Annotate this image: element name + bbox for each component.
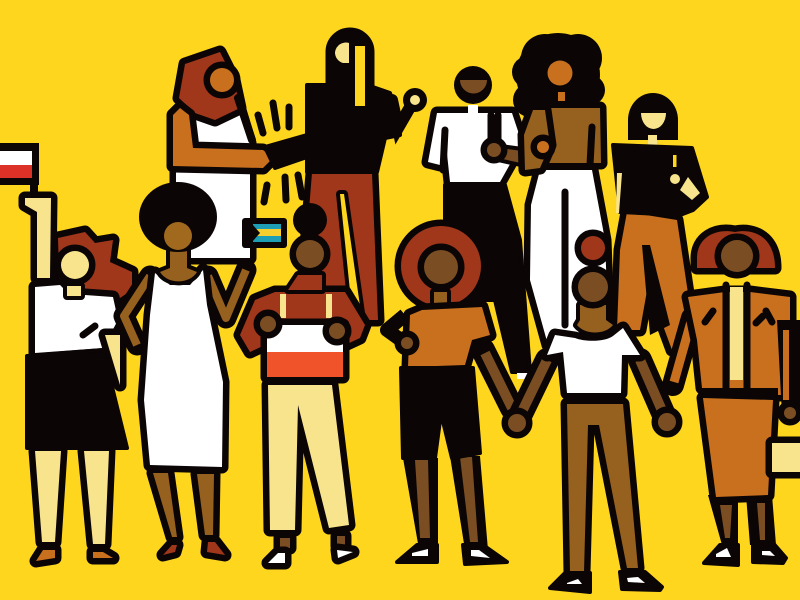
- forearm: [680, 177, 700, 200]
- red trousers: [300, 173, 378, 320]
- neck: [577, 305, 613, 332]
- brick red shirt and arms: [240, 292, 365, 352]
- neck: [648, 135, 657, 151]
- bent arm: [173, 108, 273, 168]
- face: [164, 222, 192, 250]
- trousers: [567, 404, 638, 572]
- handbag: [772, 443, 800, 472]
- neck: [160, 250, 197, 281]
- head: [578, 272, 608, 302]
- long hair: [327, 29, 373, 110]
- black top: [613, 145, 707, 215]
- jacket: [688, 292, 790, 395]
- black jacket: [265, 85, 400, 172]
- neck: [468, 105, 478, 115]
- hands: [508, 414, 526, 432]
- pocket arm line: [443, 130, 445, 170]
- raised fist: [403, 88, 427, 112]
- flag: white and red: [0, 143, 39, 196]
- orange shirt: [408, 307, 490, 367]
- hand: [784, 407, 796, 419]
- hijab edge: [238, 98, 252, 140]
- handshake motion lines: [258, 103, 302, 202]
- sign: white and red stripes: [267, 325, 343, 377]
- hair: [401, 226, 481, 306]
- person: woman with flag raised: [0, 143, 132, 561]
- foot: [517, 373, 528, 379]
- head: [296, 240, 324, 268]
- cream trousers: [268, 385, 349, 530]
- arm lines: [491, 115, 498, 140]
- trouser centre line: [562, 192, 568, 325]
- right arm: [777, 320, 800, 415]
- person: man in white shirt: [428, 66, 530, 379]
- arm: [524, 110, 550, 170]
- black skirt: [27, 350, 127, 448]
- head: [61, 251, 89, 279]
- face: [210, 68, 234, 92]
- person: woman with large afro: [512, 33, 608, 345]
- lowered forearm: [105, 335, 120, 385]
- hand: [537, 141, 549, 153]
- person: woman in orange suit: [673, 231, 800, 565]
- left arm: [517, 360, 547, 422]
- hair: [628, 93, 678, 140]
- legs: [403, 458, 438, 555]
- blouse: [730, 287, 743, 380]
- curly red hair: [58, 232, 132, 300]
- black shorts: [401, 368, 480, 458]
- raised arm: [25, 198, 51, 278]
- head: [424, 250, 458, 284]
- lapels and centre lines: [705, 285, 772, 392]
- black trousers: [445, 185, 530, 372]
- shoes: [550, 573, 590, 592]
- face: [460, 80, 487, 94]
- neck: [434, 292, 447, 308]
- shoes: [268, 553, 285, 563]
- hand: [670, 174, 680, 184]
- hijab: [179, 52, 240, 120]
- legs: [35, 451, 61, 542]
- person: woman with black bob: [613, 93, 707, 350]
- head: [454, 66, 492, 104]
- shirt: [428, 113, 520, 182]
- face: [335, 43, 349, 63]
- legs: [153, 473, 177, 537]
- raised arm: [392, 100, 413, 128]
- waist fold: [590, 127, 592, 165]
- afro: [139, 182, 217, 252]
- bun: [581, 236, 605, 260]
- hip arm: [124, 276, 150, 345]
- right arm: [483, 350, 512, 408]
- shoes: [704, 545, 738, 565]
- ankles: [280, 536, 345, 548]
- left arm: [673, 318, 692, 385]
- brown top: [545, 108, 601, 163]
- hand: [401, 337, 413, 349]
- right arm: [640, 360, 667, 422]
- neck area: [288, 275, 322, 290]
- person: woman with bun and sign: [240, 203, 365, 563]
- skirt: [703, 398, 773, 497]
- hand: [487, 143, 501, 157]
- white shirt: [35, 285, 118, 353]
- legs: [708, 495, 738, 545]
- white dress: [176, 110, 250, 258]
- neck: [558, 92, 565, 101]
- afro hair: [512, 33, 605, 117]
- shirt fold: [83, 326, 95, 335]
- face: [548, 60, 572, 86]
- bun: [293, 203, 327, 237]
- white trousers: [530, 170, 608, 345]
- shoes: [397, 545, 437, 562]
- trouser wedge: [642, 245, 670, 335]
- shirt: [547, 328, 640, 393]
- Bahamas flag: [242, 218, 287, 248]
- straps: [280, 294, 286, 318]
- white dress: [144, 270, 223, 467]
- forearm: [498, 148, 530, 165]
- orange trousers: [617, 212, 695, 350]
- neck: [67, 286, 81, 296]
- person: woman in white shirt with bun: [508, 236, 676, 592]
- strap: [673, 155, 676, 167]
- trouser leg gap: [340, 194, 362, 320]
- shoes: [163, 545, 177, 555]
- person: woman in hijab shaking hands: [173, 52, 273, 258]
- left arm: [387, 315, 405, 343]
- shoes: [36, 550, 55, 561]
- hands: [260, 316, 276, 332]
- hair highlight: [355, 46, 365, 106]
- person: woman with red hair ring: [387, 226, 512, 564]
- person: woman in black suit: [265, 29, 427, 320]
- face: [641, 113, 666, 129]
- person: woman with afro in white dress: [124, 182, 246, 555]
- hair: [697, 231, 775, 268]
- head: [721, 240, 753, 272]
- raised arm: [208, 270, 246, 318]
- left arm highlight: [616, 173, 622, 213]
